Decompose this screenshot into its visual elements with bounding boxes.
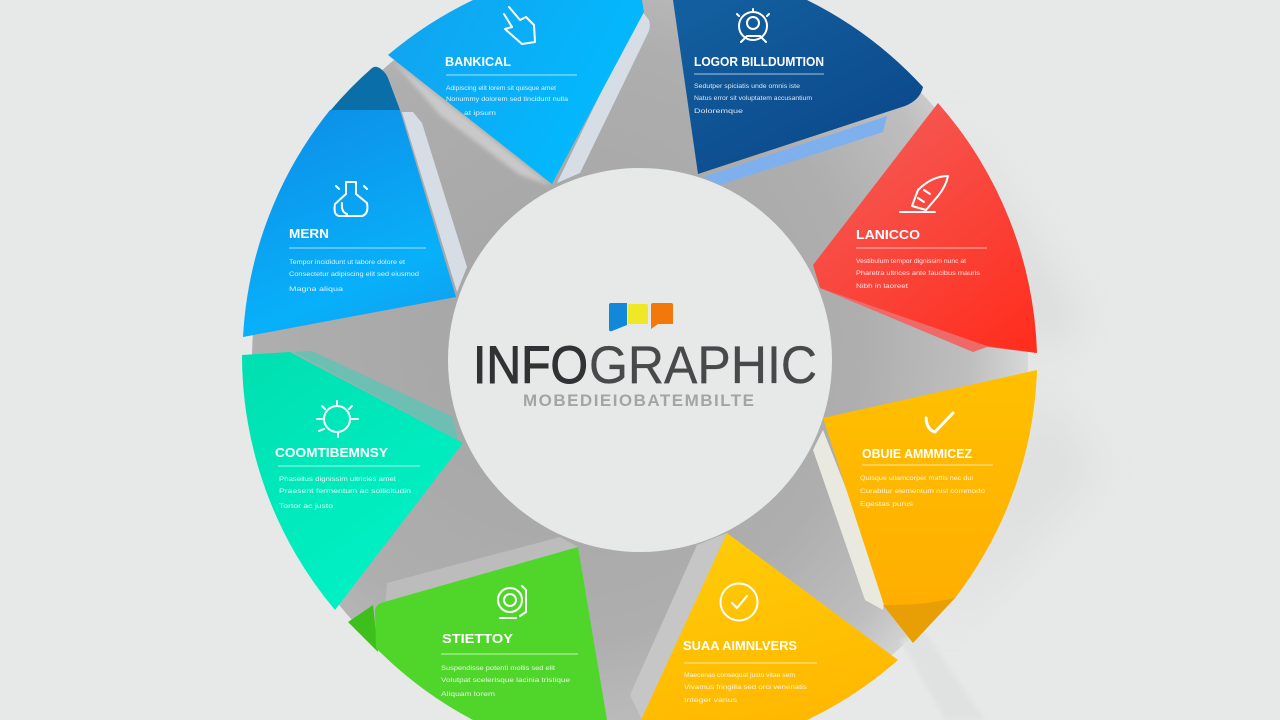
body text [694, 83, 812, 115]
panel: red, right [813, 103, 1037, 353]
body text: Sedutper spiciatis unde omnis iste [694, 83, 800, 90]
body text: Maecenas consequat justo vitae sem [684, 672, 795, 679]
subtitle: MOBEDIEIOBATEMBILTE [523, 391, 754, 410]
panel: dark blue, top right [673, 0, 923, 185]
body text [279, 476, 411, 510]
body text [441, 665, 570, 698]
body text: Tempor incididunt ut labore dolore et [289, 259, 405, 266]
body text [856, 258, 981, 290]
title: INFO [473, 336, 588, 395]
body text: Nonummy dolorem sed tincidunt nulla [446, 96, 568, 103]
body text: Quisque ullamcorper mattis nec dui [860, 475, 973, 482]
heading: STIETTOY [442, 631, 513, 646]
icon: pointing hand [504, 7, 535, 44]
panel: yellow, bottom [630, 533, 898, 720]
body text: Integer varius [684, 697, 738, 704]
heading: LANICCO [856, 227, 920, 242]
icon: sun bulb [317, 401, 358, 437]
body text: Magna aliqua [289, 286, 344, 293]
body text: Tortor ac justo [279, 503, 334, 510]
heading: SUAA AIMNLVERS [683, 638, 797, 653]
body text [860, 475, 985, 508]
icon: target badge [498, 586, 526, 618]
icon: circled check [720, 584, 758, 620]
body text: Praesent fermentum ac sollicitudin [279, 488, 411, 495]
body text: Pharetra ultrices ante faucibus mauris [856, 270, 981, 277]
grey wheel base [252, 0, 1028, 720]
icon: flask [335, 182, 367, 216]
panel: orange yellow, right [813, 370, 1037, 643]
center circle [448, 168, 832, 552]
icon: gear badge [737, 9, 769, 42]
body text: Curabitur elementum nisl commodo [860, 488, 985, 495]
body text [684, 672, 808, 704]
light band lower right [900, 632, 985, 720]
panel: green, bottom [348, 537, 607, 720]
heading: OBUIE AMMMICEZ [862, 446, 972, 461]
heading: BANKICAL [445, 54, 511, 69]
body text [446, 85, 568, 117]
body text: Vestibulum tempor dignissim nunc at [856, 258, 966, 265]
title continuation: GRAPHIC [589, 336, 817, 395]
icon: check mark [926, 413, 953, 432]
body text: Nibh in laoreet [856, 283, 908, 290]
panel: light blue, left [243, 67, 467, 337]
body text: Natus error sit voluptatem accusantium [694, 95, 812, 102]
logo: three speech flags [609, 303, 673, 331]
soft shadows outside the wheel [940, 110, 1100, 640]
heading: COOMTIBEMNSY [275, 445, 388, 460]
body text: Adipiscing elit lorem sit quisque amet [446, 85, 556, 92]
panel: sky blue, top left [388, 0, 650, 186]
body text: Phasellus dignissim ultricies amet [279, 476, 396, 483]
body text [289, 259, 419, 293]
heading: LOGOR BILLDUMTION [694, 54, 824, 69]
body text: Doloremque [694, 108, 744, 115]
body text: Volutpat scelerisque lacinia tristique [441, 677, 570, 684]
body text: Suspendisse potenti mollis sed elit [441, 665, 555, 672]
icon: rocket [900, 176, 948, 212]
body text: at ipsum [464, 110, 496, 117]
body text: Aliquam lorem [441, 691, 495, 698]
body text: Egestas purus [860, 501, 914, 508]
panel: teal, left [242, 351, 463, 610]
body text: Consectetur adipiscing elit sed eiusmod [289, 271, 419, 278]
heading: MERN [289, 226, 329, 241]
body text: Vivamus fringilla sed orci venenatis [684, 684, 808, 691]
